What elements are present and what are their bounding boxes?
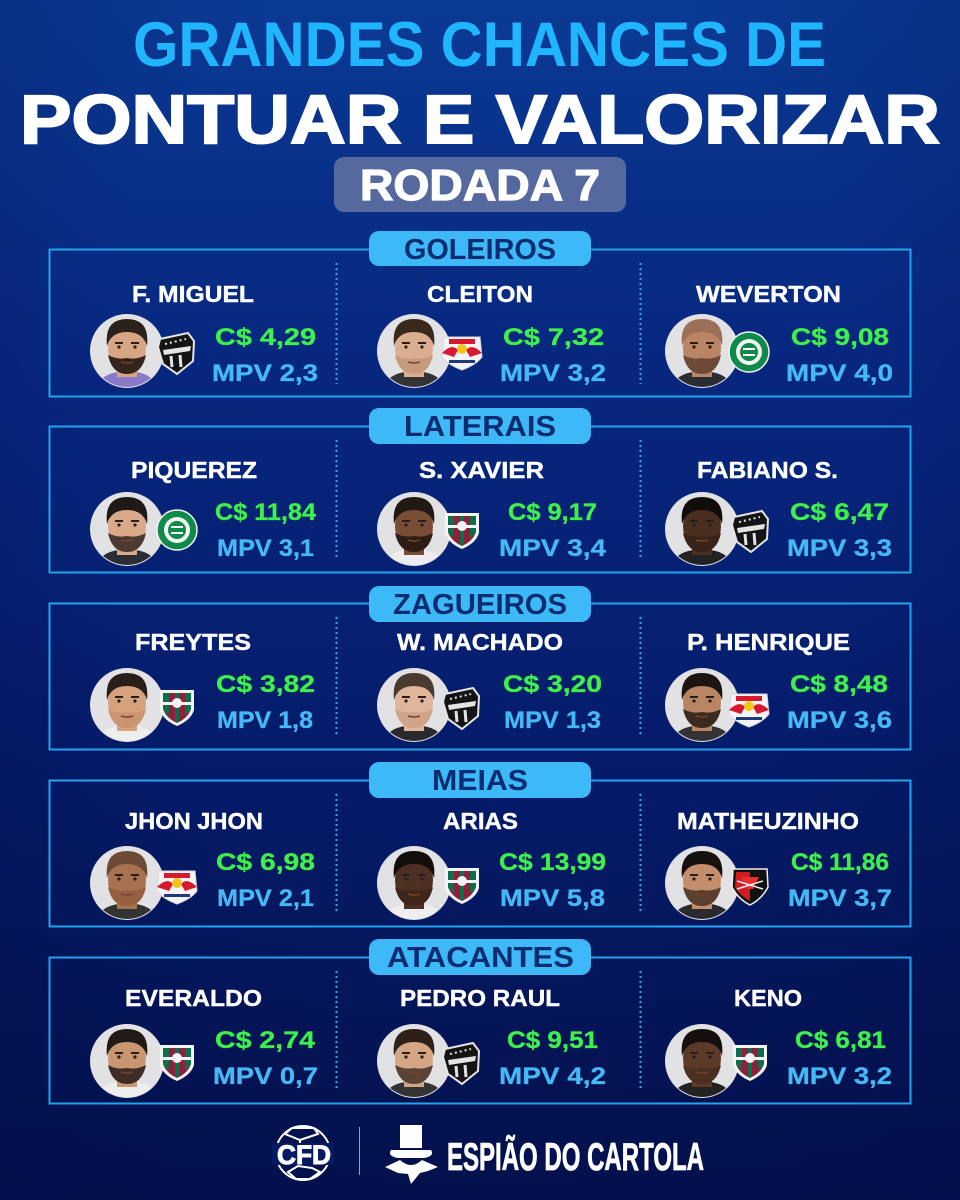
round badge (334, 157, 626, 212)
player: Cleiton: MPV 3,2 (500, 360, 606, 387)
heading: goleiros: GOLEIROS (404, 234, 556, 266)
player: F. Miguel: MPV 2,3 (212, 360, 318, 387)
heading: laterais: LATERAIS (404, 411, 556, 443)
player: Jhon Jhon: JHON JHON (125, 808, 263, 834)
footer logos (272, 1125, 704, 1184)
player: Pedro Raul: MPV 4,2 (499, 1063, 606, 1090)
player: Cleiton (377, 281, 606, 389)
player: P. Henrique: P. HENRIQUE (687, 629, 850, 655)
player: Fabiano S.: MPV 3,3 (787, 535, 892, 562)
player: S. Xavier: C$ 9,17 (508, 499, 597, 526)
player: S. Xavier: MPV 3,4 (499, 535, 607, 562)
player: Jhon Jhon (90, 808, 315, 921)
heading: meias: MEIAS (432, 765, 528, 797)
heading: goleiros (369, 231, 591, 266)
heading: atacantes: ATACANTES (387, 942, 574, 974)
panel: laterais (50, 408, 910, 572)
player: S. Xavier: S. XAVIER (419, 457, 544, 483)
player: Weverton: WEVERTON (696, 281, 841, 307)
player: P. Henrique: MPV 3,6 (787, 707, 892, 734)
player: Piquerez (90, 457, 317, 567)
player: Keno: KENO (734, 985, 802, 1011)
player: Keno: C$ 6,81 (795, 1027, 886, 1054)
title: pontuar e valorizar: PONTUAR E VALORIZAR (20, 81, 940, 158)
player: F. Miguel: F. MIGUEL (132, 281, 254, 307)
player: Fabiano S.: FABIANO S. (697, 457, 838, 483)
player: Arias: ARIAS (443, 808, 518, 834)
logo: CFD ball (272, 1126, 334, 1180)
player: Weverton: C$ 9,08 (791, 324, 889, 351)
player: S. Xavier (377, 457, 607, 567)
heading: zagueiros: ZAGUEIROS (393, 589, 567, 621)
panel: atacantes (50, 939, 910, 1104)
player: W. Machado: W. MACHADO (397, 629, 563, 655)
player: Everaldo: C$ 2,74 (215, 1027, 316, 1054)
logo: spy with top hat (385, 1125, 438, 1184)
player: Arias: MPV 5,8 (500, 885, 605, 912)
player: Pedro Raul (377, 985, 606, 1099)
heading: meias (369, 762, 591, 798)
player: Arias (377, 808, 606, 921)
player: Matheuzinho: MATHEUZINHO (677, 808, 859, 834)
player: W. Machado: MPV 1,3 (504, 707, 601, 734)
player: Jhon Jhon: C$ 6,98 (216, 849, 315, 876)
player: Matheuzinho: C$ 11,86 (791, 849, 889, 876)
player: Freytes: C$ 3,82 (216, 671, 315, 698)
player: F. Miguel: C$ 4,29 (215, 324, 316, 351)
player: Weverton (665, 281, 893, 389)
panel: goleiros (50, 231, 910, 396)
player: Matheuzinho: MPV 3,7 (788, 885, 892, 912)
player: Everaldo: MPV 0,7 (213, 1063, 318, 1090)
logo text: Espião do Cartola: ESPIÃO DO CARTOLA (447, 1135, 704, 1179)
player: Weverton: MPV 4,0 (786, 360, 893, 387)
player: Fabiano S.: C$ 6,47 (790, 499, 889, 526)
player: Keno (665, 985, 892, 1099)
player: Cleiton: C$ 7,32 (503, 324, 604, 351)
player: Jhon Jhon: MPV 2,1 (217, 885, 314, 912)
player: Keno: MPV 3,2 (787, 1063, 892, 1090)
player: P. Henrique: C$ 8,48 (790, 671, 888, 698)
player: Freytes (90, 629, 315, 743)
player: Freytes: MPV 1,8 (217, 707, 313, 734)
player: Fabiano S. (665, 457, 892, 567)
player: Cleiton: CLEITON (427, 281, 533, 307)
panel: meias (50, 762, 910, 926)
player: Piquerez: MPV 3,1 (217, 535, 314, 562)
player: W. Machado (377, 629, 602, 743)
player: Everaldo (90, 985, 318, 1099)
player: Matheuzinho (665, 808, 892, 921)
panel: zagueiros (50, 586, 910, 750)
heading: laterais (369, 408, 591, 444)
round badge: RODADA 7 (360, 161, 600, 210)
heading: atacantes (369, 939, 591, 975)
player: Arias: C$ 13,99 (499, 849, 606, 876)
player: Everaldo: EVERALDO (125, 985, 262, 1011)
player: F. Miguel (90, 281, 318, 389)
player: Pedro Raul: C$ 9,51 (507, 1027, 598, 1054)
player: Pedro Raul: PEDRO RAUL (400, 985, 560, 1011)
player: P. Henrique (665, 629, 892, 743)
heading: zagueiros (369, 586, 591, 622)
player: Piquerez: C$ 11,84 (215, 499, 317, 526)
title: grandes chances de: GRANDES CHANCES DE (133, 10, 826, 80)
logo: CFD ball: CFD (277, 1140, 331, 1170)
player: W. Machado: C$ 3,20 (503, 671, 602, 698)
player: Piquerez: PIQUEREZ (131, 457, 257, 483)
player: Freytes: FREYTES (135, 629, 251, 655)
